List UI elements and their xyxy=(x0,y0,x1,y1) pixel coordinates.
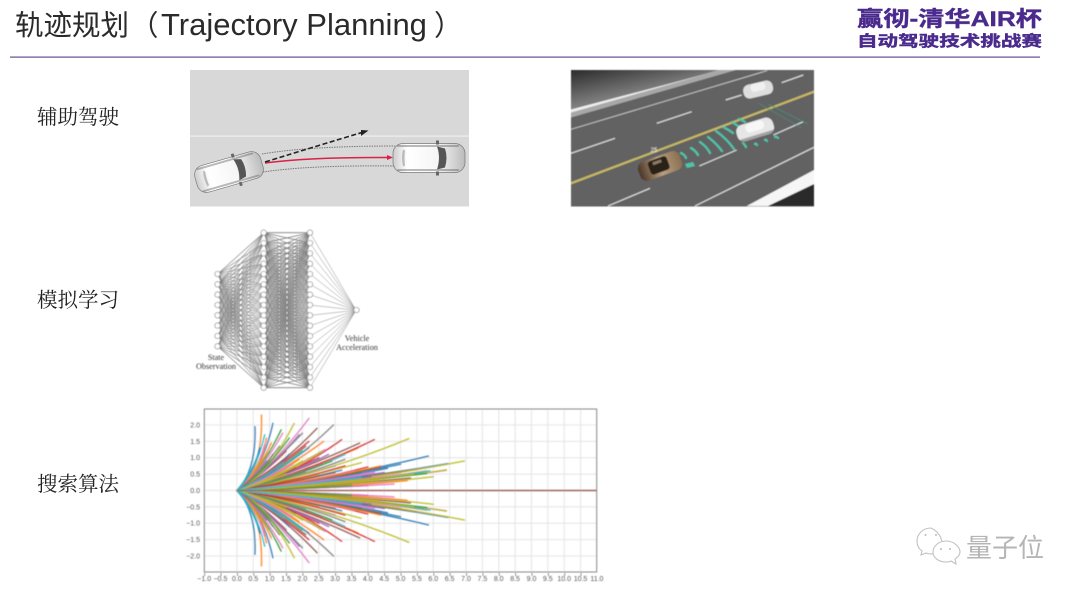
x axis ticks: 3.0 xyxy=(330,576,340,583)
y axis ticks: 1.0 xyxy=(190,455,200,462)
logo: competition name: 自动驾驶技术挑战赛 xyxy=(857,32,1042,50)
y axis ticks: 1.5 xyxy=(190,439,200,446)
y axis ticks xyxy=(186,422,200,560)
title: Trajectory Planning xyxy=(161,7,427,42)
x axis ticks: 6.5 xyxy=(445,576,455,583)
label: state observation: Observation xyxy=(196,362,236,371)
y axis ticks: −1.5 xyxy=(186,537,200,544)
x axis ticks: 8.0 xyxy=(494,576,504,583)
x axis ticks: 7.5 xyxy=(478,576,487,583)
black dashed arrow xyxy=(265,130,368,162)
x axis ticks: 8.5 xyxy=(510,576,520,583)
y axis ticks: −2.0 xyxy=(186,553,200,560)
x axis ticks: −0.5 xyxy=(214,576,228,583)
x axis ticks: 1.5 xyxy=(281,576,291,583)
x axis ticks: 3.5 xyxy=(347,576,356,583)
car: white far xyxy=(742,79,774,100)
x axis ticks: 5.5 xyxy=(412,576,422,583)
watermark: wechat icon xyxy=(917,528,960,564)
x axis ticks: 9.0 xyxy=(527,576,536,583)
label: search algorithm: 搜索算法 xyxy=(37,473,119,496)
y axis ticks: −1.0 xyxy=(186,521,200,528)
neural network diagram xyxy=(196,155,378,465)
x axis ticks: 2.5 xyxy=(314,576,324,583)
x axis ticks: 6.0 xyxy=(428,576,438,583)
x axis ticks: 2.0 xyxy=(298,576,307,583)
watermark: brand name: 量子位 xyxy=(966,533,1044,563)
x axis ticks: 11.0 xyxy=(590,576,604,583)
y axis ticks: 0.0 xyxy=(190,488,200,495)
x axis ticks: 0.5 xyxy=(248,576,258,583)
label: vehicle acceleration: Vehicle xyxy=(345,334,369,343)
title: ） xyxy=(434,10,463,42)
x axis ticks: 4.5 xyxy=(379,576,389,583)
x axis ticks xyxy=(197,576,604,583)
y axis ticks: −0.5 xyxy=(186,504,200,511)
x axis ticks: 7.0 xyxy=(461,576,471,583)
x axis ticks: 10.0 xyxy=(557,576,571,583)
x axis ticks: 0.0 xyxy=(232,576,242,583)
car: white middle xyxy=(734,116,776,143)
x axis ticks: 1.0 xyxy=(265,576,275,583)
y axis ticks: 0.5 xyxy=(190,472,200,479)
y axis ticks: 2.0 xyxy=(190,422,200,430)
label: imitation learning: 模拟学习 xyxy=(37,289,119,312)
title: 轨迹规划 xyxy=(15,10,129,42)
image: lane change top view xyxy=(190,70,469,206)
title: （ xyxy=(130,10,159,42)
car: changing lane xyxy=(192,147,266,197)
x axis ticks: 4.0 xyxy=(363,576,373,583)
x axis ticks: −1.0 xyxy=(197,576,211,583)
header rule xyxy=(10,56,1040,58)
car: brown ego xyxy=(636,149,684,183)
x axis ticks: 5.0 xyxy=(396,576,406,583)
red planned path xyxy=(265,155,393,163)
logo: competition name xyxy=(857,8,1042,50)
trajectory fan chart xyxy=(186,409,604,583)
title xyxy=(15,7,463,42)
label: state observation: State xyxy=(208,353,224,362)
logo: competition name: 赢彻-清华AIR杯 xyxy=(857,8,1042,31)
label: vehicle acceleration: Acceleration xyxy=(336,343,378,352)
label: assisted driving: 辅助驾驶 xyxy=(37,106,119,129)
x axis ticks: 10.5 xyxy=(574,576,587,583)
teal guidance arcs xyxy=(681,119,778,158)
speed marker: 25 xyxy=(651,148,658,154)
x axis ticks: 9.5 xyxy=(543,576,553,583)
car: ahead xyxy=(393,140,465,176)
image: highway scene xyxy=(571,70,814,206)
